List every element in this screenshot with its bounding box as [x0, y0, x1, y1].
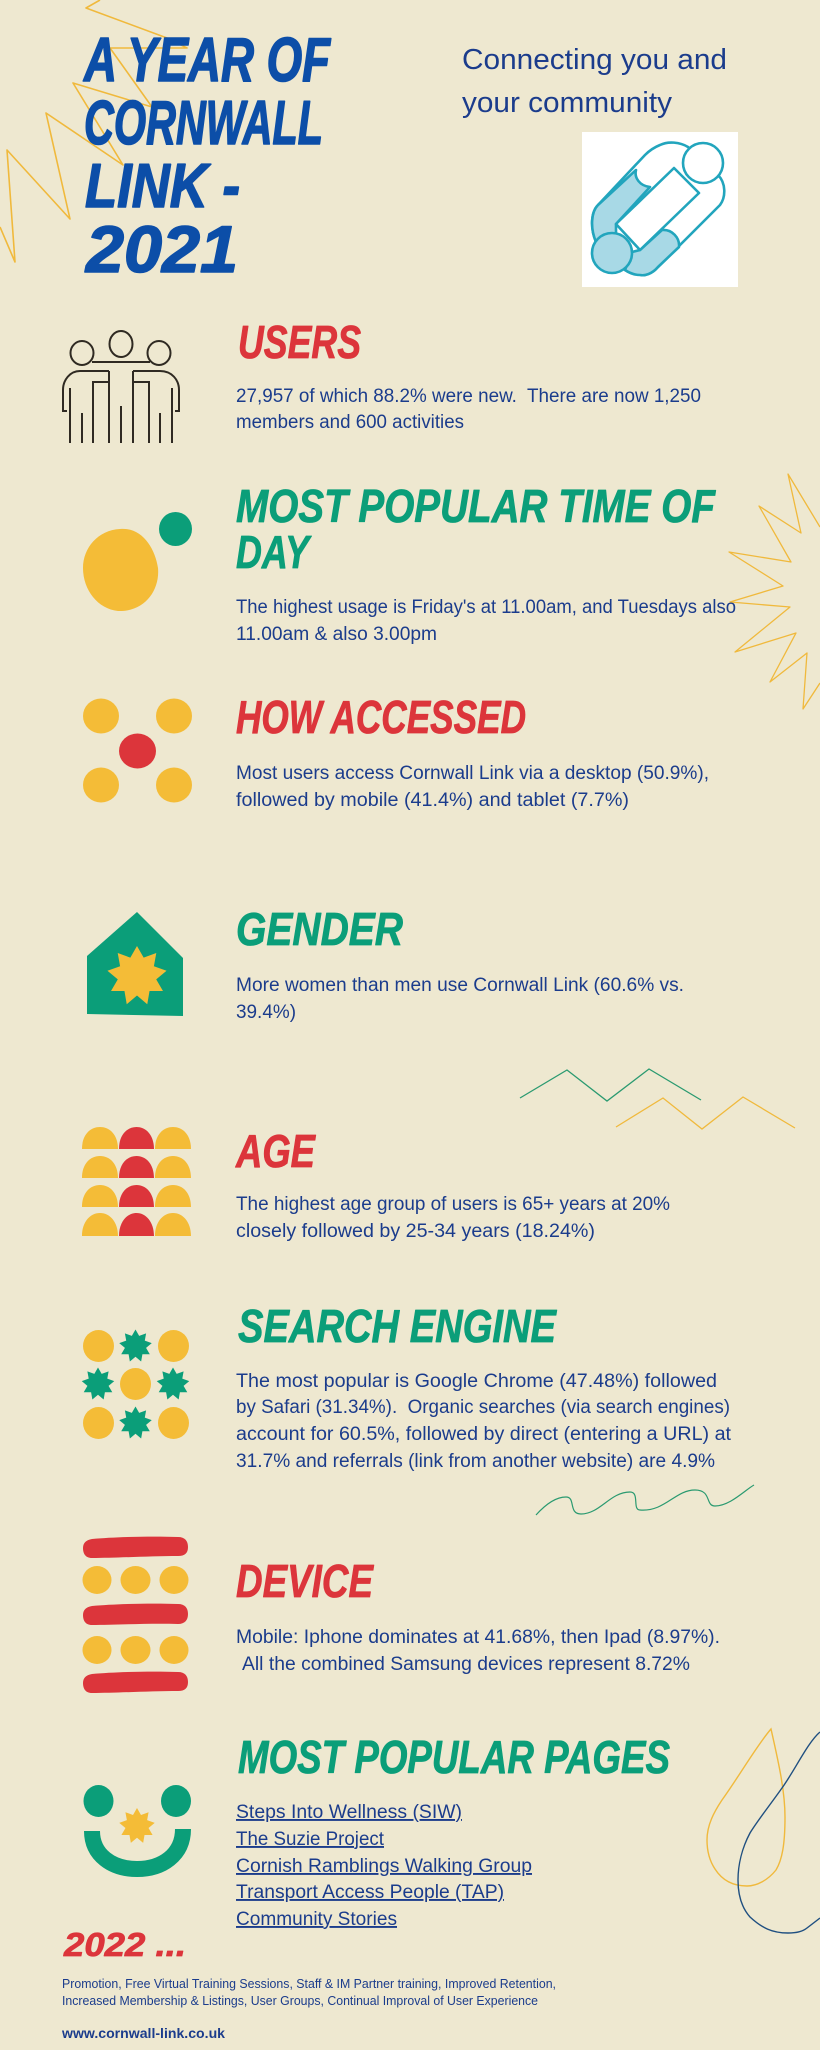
heading: users: USERS [238, 316, 361, 368]
text: 2022 plans: Promotion, Free Virtual Training Sessions, Staff & IM Partner training, Improved Retention, [62, 1976, 556, 1991]
text: how accessed: Most users access Cornwall Link via a desktop (50.9%), [236, 763, 709, 784]
text: how accessed [236, 763, 709, 811]
text: gender: More women than men use Cornwall Link (60.6% vs. [236, 975, 684, 996]
tagline: your community [462, 87, 673, 119]
list: most popular pages links: The Suzie Project [236, 1829, 385, 1850]
text: search engine: 31.7% and referrals (link from another website) are 4.9% [236, 1451, 715, 1472]
text: age: The highest age group of users is 65+ years at 20% [236, 1194, 670, 1215]
decoration: yellow zigzag top left [0, 0, 187, 262]
icon: search engine pattern [82, 1330, 189, 1439]
text: age: closely followed by 25-34 years (18.24%) [236, 1221, 595, 1242]
text: users [236, 386, 701, 433]
text: most popular time of day: 11.00am & also 3.00pm [236, 624, 437, 645]
icon: time of day [83, 512, 192, 611]
heading: age: AGE [235, 1125, 316, 1177]
heading: search engine: SEARCH ENGINE [238, 1300, 557, 1352]
text: most popular time of day [236, 597, 736, 645]
decoration: yellow starburst right [729, 474, 820, 709]
icon: gender house with star [87, 912, 183, 1016]
decoration: green and yellow mountain lines [520, 1069, 795, 1129]
title [83, 26, 332, 286]
decoration: green squiggle [536, 1485, 754, 1515]
list: most popular pages links [236, 1802, 532, 1930]
title: CORNWALL [84, 89, 323, 158]
list: most popular pages links: Community Stories [236, 1909, 397, 1930]
text: device: All the combined Samsung devices represent 8.72% [242, 1654, 690, 1675]
text: users: 27,957 of which 88.2% were new. There are now 1,250 [236, 386, 701, 407]
heading: gender: GENDER [236, 903, 403, 955]
title: LINK - [85, 152, 240, 221]
list: most popular pages links: Cornish Ramblings Walking Group [236, 1856, 532, 1877]
icon: users group [63, 331, 179, 443]
text: how accessed: followed by mobile (41.4%) and tablet (7.7%) [236, 790, 629, 811]
heading: most popular time of day [236, 480, 717, 578]
text: gender [236, 975, 684, 1023]
decoration: yellow and blue drop outlines [707, 1729, 820, 1933]
icon: age domes [82, 1127, 191, 1236]
icon: device bars and dots [82, 1537, 188, 1693]
text: 2022 plans: Increased Membership & Listings, User Groups, Continual Improval of User Experience [62, 1993, 538, 2008]
text: device: Mobile: Iphone dominates at 41.68%, then Ipad (8.97%). [236, 1627, 720, 1648]
heading: most popular pages: MOST POPULAR PAGES [238, 1731, 670, 1783]
heading: most popular time of day: MOST POPULAR TIME OF [236, 480, 717, 532]
heading: most popular time of day: DAY [236, 526, 312, 578]
text: most popular time of day: The highest usage is Friday's at 11.00am, and Tuesdays also [236, 597, 736, 618]
heading: how accessed: HOW ACCESSED [236, 691, 526, 743]
icon: how accessed dots [83, 698, 192, 802]
text: website address: www.cornwall-link.co.uk [61, 2026, 226, 2041]
text: users: members and 600 activities [236, 412, 464, 433]
title: 2021 [84, 212, 238, 286]
tagline [462, 44, 727, 119]
text: search engine [236, 1371, 732, 1472]
logo: Cornwall Link [582, 132, 738, 287]
text: age [236, 1194, 670, 1242]
heading: device: DEVICE [236, 1555, 374, 1607]
text: search engine: The most popular is Google Chrome (47.48%) followed [236, 1371, 717, 1392]
title: A YEAR OF [83, 26, 332, 95]
text: 2022 plans [62, 1976, 556, 2008]
text: gender: 39.4%) [236, 1002, 296, 1023]
list: most popular pages links: Transport Access People (TAP) [236, 1882, 504, 1903]
tagline: Connecting you and [462, 44, 727, 76]
text: search engine: account for 60.5%, followed by direct (entering a URL) at [236, 1424, 732, 1445]
text: device [236, 1627, 720, 1675]
text: search engine: by Safari (31.34%). Organic searches (via search engines) [236, 1397, 730, 1418]
icon: smiley face [84, 1785, 191, 1869]
heading: 2022: 2022 ... [63, 1926, 186, 1963]
list: most popular pages links: Steps Into Wellness (SIW) [236, 1802, 462, 1823]
